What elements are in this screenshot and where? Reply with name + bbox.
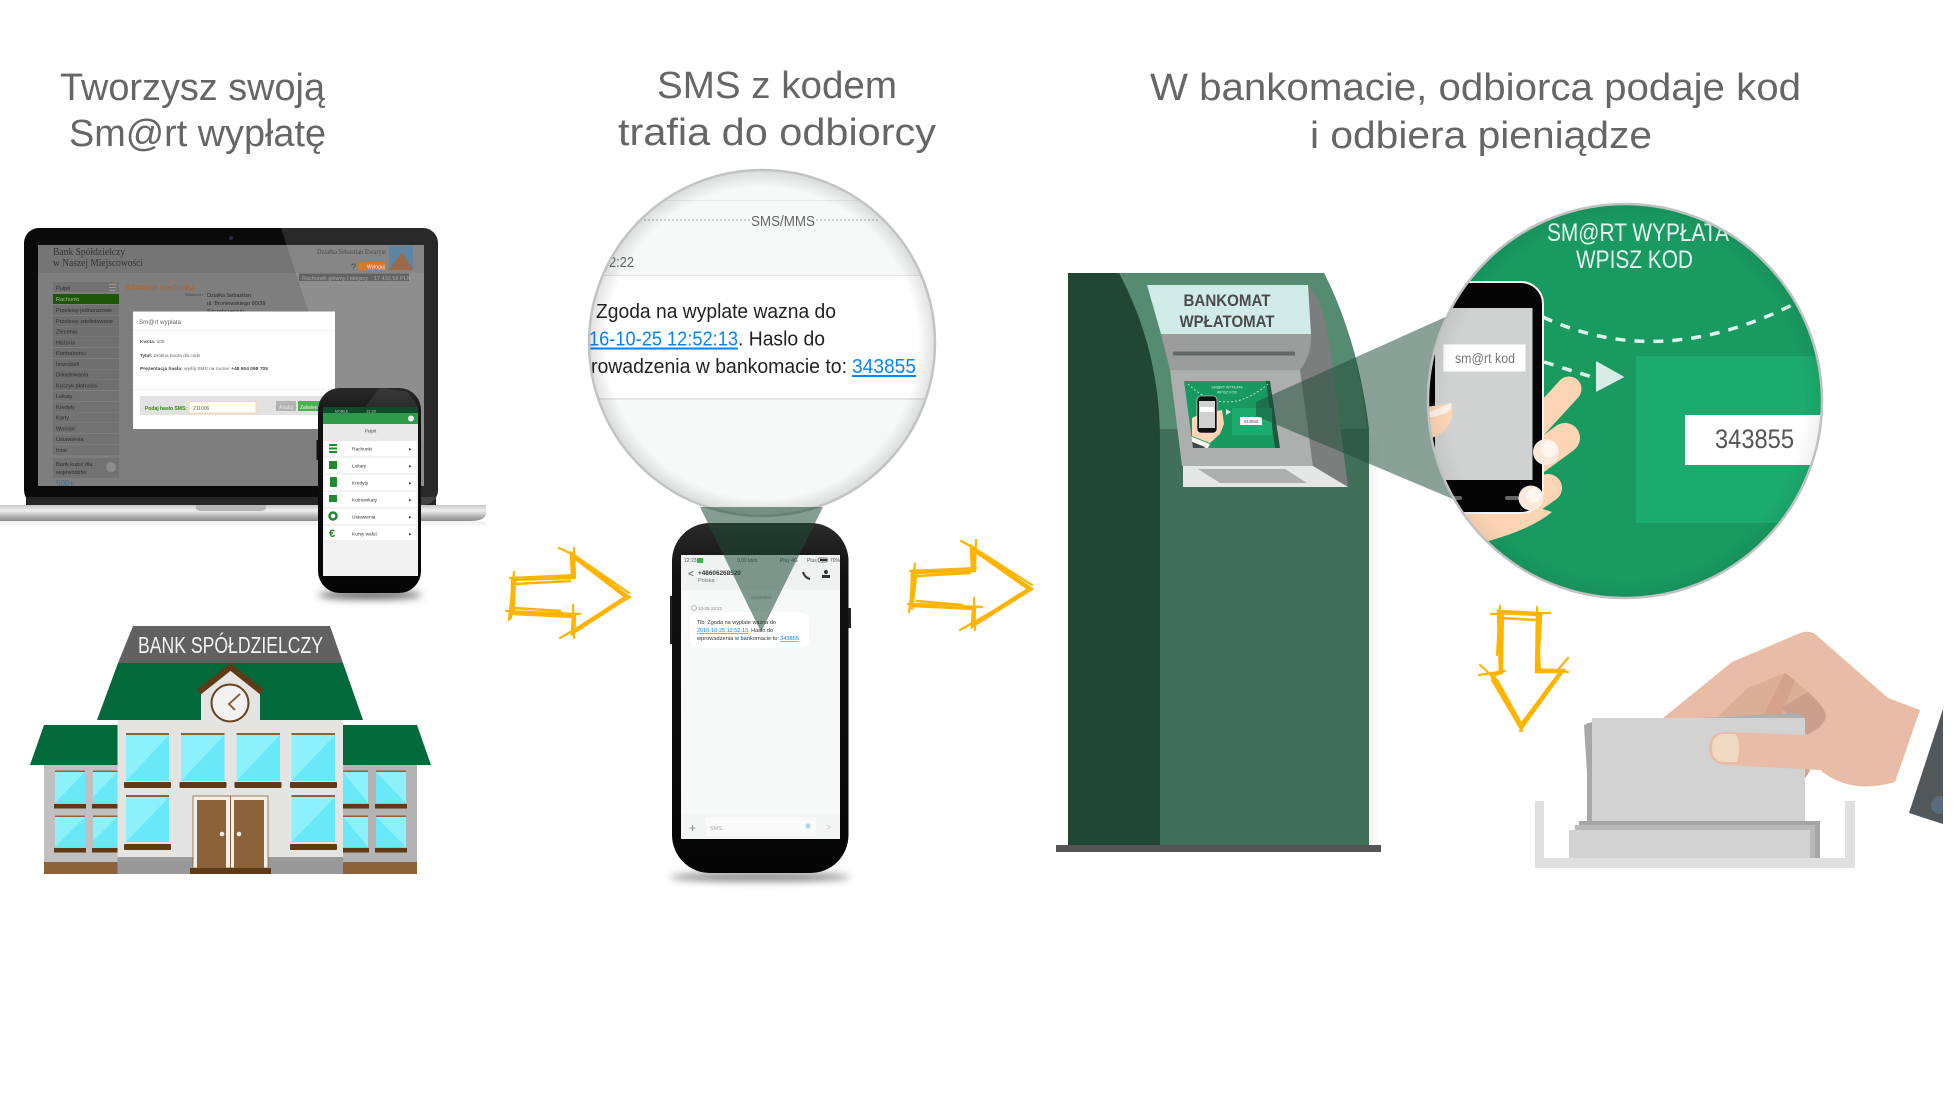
screen heading: SM@RT WYPŁATA xyxy=(1547,219,1729,247)
sidebar menu: Lokaty xyxy=(56,394,73,400)
mobile menu rows: ▸ xyxy=(409,446,412,452)
ATM screen: SM@RT WYPŁATA xyxy=(1211,386,1243,390)
sidebar menu xyxy=(53,282,119,488)
modal: Sm@rt wyplata: Sm@rt wypłata xyxy=(139,319,182,326)
held banknotes xyxy=(1584,713,1805,821)
sidebar menu: Historia xyxy=(56,340,76,346)
SMS message text: . Haslo do xyxy=(738,328,825,350)
account information: Szczebrzeszyn xyxy=(207,309,244,315)
phone with SMS: SMS/MMS xyxy=(750,595,772,600)
account header: ? xyxy=(351,262,356,272)
modal: Sm@rt wyplata: Podaj hasło SMS: xyxy=(145,406,187,412)
arrow 3 xyxy=(1479,606,1568,731)
account header: Rachunek główny i miejscy xyxy=(302,276,368,282)
dashed path xyxy=(1543,303,1796,377)
sidebar menu: województw xyxy=(55,470,87,476)
phone with SMS: 10-25 12:22 xyxy=(698,606,723,611)
phone status bar: 12:23 xyxy=(684,558,697,564)
mobile menu rows: Kursy walut xyxy=(352,532,377,538)
account information: ul. Broniewskiego 90/39 xyxy=(207,301,265,307)
message bubble: wprowadzenia w bankomacie to: xyxy=(696,636,779,642)
mobile menu rows: Komunikaty xyxy=(352,498,378,504)
phone status bar: 0,00 kb/s xyxy=(737,558,758,564)
title: step 3: W bankomacie, odbiorca podaje kod xyxy=(1150,67,1801,109)
account information: Działka Sebastian xyxy=(207,293,251,299)
title: step 2 xyxy=(618,65,936,154)
title: step 2: SMS z kodem xyxy=(657,65,897,107)
sender: < xyxy=(688,569,694,580)
message bubble: 2016-10-25 12:52:13 xyxy=(697,628,748,634)
title: step 3 xyxy=(1150,67,1801,157)
mobile menu rows: Ustawienia xyxy=(352,514,376,520)
sidebar menu: Rachunki xyxy=(56,297,79,303)
SMS message text: rowadzenia w bankomacie to: xyxy=(591,355,847,378)
ATM sign: BANKOMAT xyxy=(1184,291,1271,310)
SMS message text: 16-10-25 12:52:13 xyxy=(589,328,738,350)
phone with mobile banking xyxy=(316,388,422,599)
mobile menu rows: ▸ xyxy=(409,464,412,470)
modal: Sm@rt wyplata: Tytuł: Drobna kwota dla córki xyxy=(140,353,200,358)
mobile menu rows: Kredyty xyxy=(352,480,369,486)
sidebar menu: Wnioski xyxy=(56,426,76,432)
sidebar menu: Doładowania xyxy=(56,372,89,378)
magnifier cone: phone xyxy=(700,507,823,632)
tray xyxy=(1535,801,1855,868)
sign: Bank Spółdzielczy xyxy=(118,626,343,663)
sender xyxy=(688,569,830,584)
title: step 1: Tworzysz swoją xyxy=(60,67,326,109)
SMS label: SMS/MMS xyxy=(751,213,815,230)
gable with clock xyxy=(199,667,262,722)
play triangle xyxy=(1596,361,1624,392)
account header: 17 432,58 PLN xyxy=(374,276,411,282)
message bubble: Tib: Zgoda na wyplate wazna do xyxy=(697,620,776,626)
modal: Sm@rt wyplata: Zatwierdź xyxy=(300,405,322,411)
sidebar menu: Zlecenia xyxy=(56,330,78,336)
bank building xyxy=(30,626,431,874)
mobile menu rows: ▸ xyxy=(409,480,412,486)
message input: SMS xyxy=(710,826,722,832)
mobile menu rows: ▸ xyxy=(409,498,412,504)
modal: Sm@rt wyplata: Anuluj xyxy=(279,405,293,411)
magnifier: SMS xyxy=(589,170,935,516)
thumb xyxy=(1709,732,1820,770)
phone status bar: 70% xyxy=(830,558,841,564)
sidebar menu: Imwokbill xyxy=(56,362,79,368)
sidebar menu: Pulpit xyxy=(56,286,70,292)
mobile menu icons xyxy=(329,444,337,540)
phone with mobile banking: 12:20 xyxy=(366,408,377,414)
phone status bar: Plus xyxy=(807,558,817,564)
phone status bar: Play 4G xyxy=(780,558,798,564)
windows xyxy=(54,733,407,852)
hand holding phone: sm@rt kod xyxy=(1455,350,1515,366)
screen heading xyxy=(1548,223,1729,268)
arrow 1 xyxy=(506,548,630,638)
modal: Sm@rt wyplata: Kwota: 100 xyxy=(140,339,165,344)
phone with mobile banking: Pulpit xyxy=(365,428,377,434)
sidebar menu: Koszyk płatności xyxy=(56,384,98,390)
bank name on laptop screen: w Naszej Miejscowości xyxy=(53,258,143,269)
door xyxy=(190,796,271,874)
sidebar menu: Kontrahenci xyxy=(56,351,86,357)
message input xyxy=(681,814,840,839)
hand xyxy=(1663,632,1920,786)
sign: Bank Spółdzielczy: BANK SPÓŁDZIELCZY xyxy=(138,632,323,658)
account information xyxy=(126,283,265,315)
mobile menu rows: ▸ xyxy=(409,532,412,538)
ATM screen: WPISZ KOD xyxy=(1217,390,1237,394)
modal: Sm@rt wyplata: 211006 xyxy=(193,406,210,412)
sender: Polska xyxy=(698,578,715,584)
title: step 1: Sm@rt wypłatę xyxy=(69,113,326,155)
sidebar menu: Karty xyxy=(56,416,69,422)
laptop with online banking xyxy=(0,228,486,525)
code panel xyxy=(1637,357,1837,522)
phone status bar xyxy=(684,558,841,564)
title: step 1 xyxy=(60,67,326,155)
account header xyxy=(299,246,413,282)
message input: + xyxy=(689,821,696,835)
modal: Sm@rt wyplata: Prezentacja hasła: wyślij SMS na numer +48 504 098 705 xyxy=(140,366,268,371)
sidebar menu: Bank kupić dla xyxy=(56,462,93,468)
magnifier cone: ATM xyxy=(1256,315,1460,502)
message bubble xyxy=(690,612,809,648)
mobile menu rows: Rachunki xyxy=(352,446,372,452)
mobile menu icons: € xyxy=(329,528,335,540)
SMS message text: 343855 xyxy=(852,355,916,378)
bank name on laptop screen xyxy=(53,247,143,269)
sender: +48606268520 xyxy=(698,570,741,577)
banknote stack xyxy=(1569,821,1820,858)
title: step 2: trafia do odbiorcy xyxy=(618,112,936,154)
arrow 2 xyxy=(908,540,1032,630)
sidebar menu: Inne xyxy=(56,448,67,454)
mobile menu rows xyxy=(325,441,416,540)
sidebar menu: 500+ xyxy=(56,479,74,488)
ATM sign xyxy=(1147,285,1311,334)
message input: > xyxy=(826,822,831,832)
title: step 3: i odbiera pieniądze xyxy=(1310,115,1652,157)
message bubble: . Haslo do xyxy=(748,628,773,634)
account header: Wyloguj xyxy=(367,264,385,270)
magnifier: ATM screen xyxy=(1400,204,1837,598)
code panel: 343855 xyxy=(1715,424,1794,454)
screen heading: WPISZ KOD xyxy=(1576,246,1693,274)
time: 2:22 xyxy=(609,254,634,271)
modal: Sm@rt wyplata xyxy=(133,312,335,429)
hand holding phone xyxy=(1400,282,1569,542)
sidebar menu: Przelewy jednorazowe xyxy=(56,308,112,314)
sleeve xyxy=(1909,709,1943,824)
SMS message text: Zgoda na wyplate wazna do xyxy=(596,300,836,323)
account information: Informacje o rachunku xyxy=(126,283,193,292)
ATM machine xyxy=(1056,273,1381,852)
ATM screen: 343855 xyxy=(1243,419,1259,424)
sidebar menu: Ustawienia xyxy=(56,437,84,443)
mobile menu rows: Lokaty xyxy=(352,464,367,470)
SMS message text xyxy=(589,300,916,378)
account information: Właściciel xyxy=(185,292,203,297)
ATM sign: WPŁATOMAT xyxy=(1180,312,1275,331)
phone with SMS xyxy=(670,523,851,881)
ATM recess xyxy=(1161,285,1348,487)
message bubble: 343855 xyxy=(780,636,799,642)
sidebar menu: Kredyty xyxy=(56,405,75,411)
bank name on laptop screen: Bank Spółdzielczy xyxy=(53,247,126,258)
laptop screen reflection xyxy=(281,228,438,505)
sidebar menu: Przelewy zdefiniowane xyxy=(56,319,113,325)
phone with mobile banking: MOBILE xyxy=(335,410,349,414)
cash dispenser with hand xyxy=(1535,632,1949,868)
ATM screen xyxy=(1184,381,1280,450)
mobile menu rows: ▸ xyxy=(409,514,412,520)
account header: Działka Sebastian Ewaryst xyxy=(317,248,386,256)
